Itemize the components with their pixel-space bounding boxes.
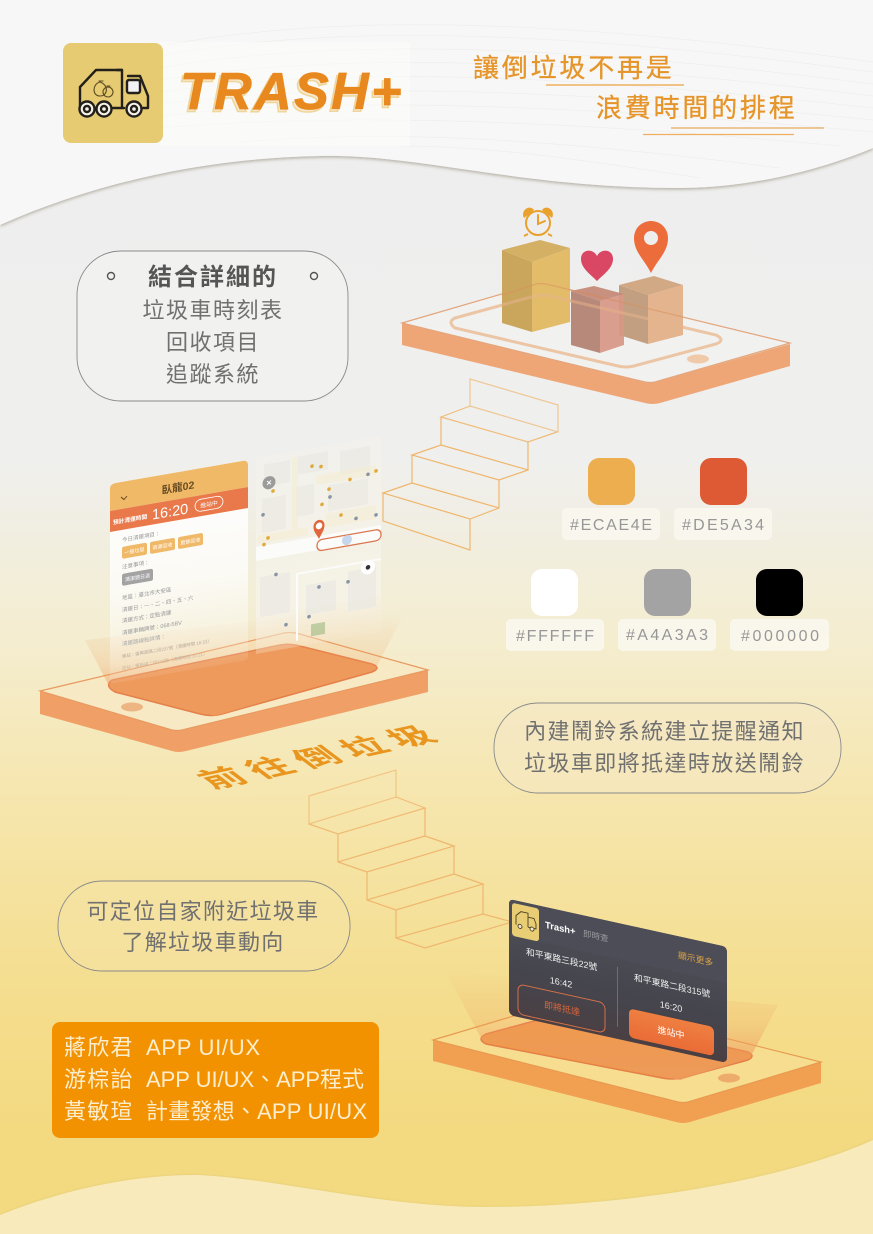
callout: features: 回收項目 [166,330,260,355]
callout: location: 可定位自家附近垃圾車 [86,899,320,924]
box: yellow [502,240,570,332]
icon: alarm clock [523,208,553,236]
app card: map [256,436,381,654]
app card: schedule: 進站：復興南路二段237號（清運時間 16:53） [122,637,212,660]
callout: location: 了解垃圾車動向 [121,930,285,955]
app card: schedule: 注意事項： [122,558,149,571]
team credits [52,1022,379,1138]
app card: schedule: 資源回收 [153,541,172,552]
callout: features [77,251,348,401]
slogan: 浪費時間的排程 [596,93,798,123]
team credits: APP UI/UX、APP程式 [146,1067,364,1092]
logo tile [63,43,163,143]
notification widget: 和平東路三段22號 [526,946,597,972]
phone platform bottom [433,968,821,1123]
brand name: TRASH+ [180,63,404,121]
phone platform top [402,284,790,404]
callout: features: 垃圾車時刻表 [142,298,284,323]
app card: schedule: 一般垃圾 [125,546,144,556]
app card: schedule: 今日清運項目： [122,529,160,544]
app card: schedule: 清潔週日溫 [125,572,150,583]
team credits: 蔣欣君 [64,1035,134,1060]
notification widget: 16:20 [660,999,682,1014]
icon: small truck [516,911,536,932]
slogan: 讓倒垃圾不再是 [473,53,675,83]
top wave band [0,0,873,225]
icon: heart [581,251,613,281]
notification widget: 顯示更多 [678,949,713,968]
callout: features: 結合詳細的 [148,264,278,291]
callout: location [58,881,350,971]
app card: schedule: 清運車輛牌號：068-5BV [122,618,182,637]
diagonal heading: 前往倒垃圾 [189,720,455,793]
app card: schedule: 清運方式：定點清運 [122,608,172,625]
team credits: APP UI/UX [146,1035,260,1060]
notification widget: 即將抵達 [544,999,580,1018]
palette swatches: #ECAE4E [570,517,652,534]
notification widget: 和平東路二段315號 [634,972,710,999]
callout: features: 追蹤系統 [166,362,260,387]
icon: map pin [634,221,668,273]
phone platform middle [40,612,428,752]
brand name: TRASH+ [178,66,402,124]
box: tan [619,276,683,344]
palette swatches: #A4A3A3 [626,627,708,644]
notification widget: 即時查 [583,927,609,944]
palette swatches: #000000 [741,628,819,645]
notification widget [509,899,727,1063]
slogan [473,53,824,134]
team credits: 計畫發想、APP UI/UX [146,1099,367,1124]
app card: schedule: 清運路線點詳情： [122,632,166,648]
app card: schedule: 預計清運時間 [113,513,147,526]
app card: schedule: 臥龍02 [162,478,194,497]
stairs lower [309,770,512,948]
palette swatches [506,458,829,651]
callout: alarm [494,703,841,793]
notification widget: 進站中 [658,1024,684,1041]
notification widget: Trash+ [545,920,576,938]
app card: schedule [110,460,248,684]
bottom wave [0,1140,873,1234]
app card: schedule: 地區：臺北市大安區 [122,585,172,602]
phone outline over boxes [502,284,683,327]
app card: schedule: 往站：羅斯福二段273號（清運時間 20:21） [122,650,207,672]
callout: alarm: 垃圾車即將抵達時放送鬧鈴 [524,751,805,776]
app card: schedule: 進站中 [200,499,218,510]
icon: garbage truck [80,70,148,116]
app card: schedule: 清運日：一、二、四、五、六 [122,593,194,614]
palette swatches: #FFFFFF [516,628,594,645]
team credits: 游棕詒 [64,1067,134,1092]
box: red [571,286,624,353]
app card: schedule: 16:20 [152,501,188,524]
app card: map: × [266,477,272,488]
app card: schedule: 廚餘回收 [181,536,200,547]
team credits: 黃敏瑄 [64,1099,134,1124]
notification widget: 16:42 [550,975,572,990]
callout: alarm: 內建鬧鈴系統建立提醒通知 [524,719,805,744]
stairs upper [383,379,558,550]
palette swatches: #DE5A34 [682,517,764,534]
